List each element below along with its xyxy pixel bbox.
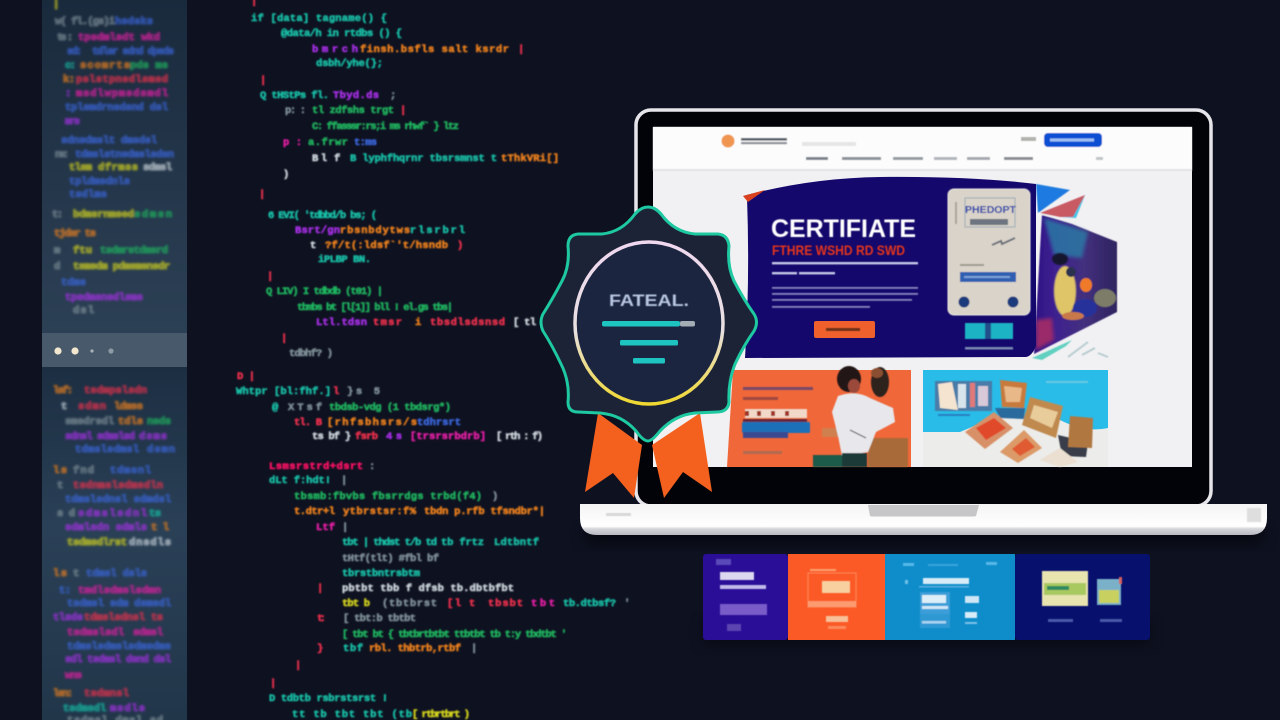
sidebar code listing, upper (52, 0, 174, 317)
sidebar code listing, lower: ts (151, 612, 163, 624)
code block: lower: tb.dtbsf? (563, 598, 616, 610)
code block: lower: D | (237, 371, 255, 383)
sidebar code listing, lower: tmdlsdmslsdmn (78, 585, 161, 597)
code block: lower: ) (492, 491, 498, 503)
laptop base (580, 504, 1267, 535)
sidebar code listing, upper: scomrts (80, 60, 130, 72)
sidebar code listing, lower: dsmn (147, 444, 175, 456)
sidebar code listing, lower: tsdmsdl (63, 703, 106, 715)
sidebar code listing, lower: tdmsnl (110, 465, 151, 477)
code block: lower: t (469, 598, 475, 610)
code block: upper: Q tHStPs fl. (260, 90, 329, 102)
sidebar code listing, lower: tdmsl dsls (86, 568, 147, 580)
code block: lower: | (341, 475, 347, 487)
code block: upper: | (518, 44, 524, 56)
banner red subtitle: FTHRE WSHD RD SWD (772, 242, 905, 258)
sidebar code listing, upper: tpsdmlsdt wkd (78, 32, 160, 44)
code block: lower: tbsbt (488, 598, 523, 610)
sidebar code listing, upper: d (54, 261, 60, 273)
code block: lower: tbt (531, 598, 555, 610)
sidebar code listing, upper: tdlsr sdnd dpsds (92, 46, 174, 58)
code block: lower: XTsf (288, 402, 322, 414)
code block: lower: ytbrstsr:f% (343, 506, 417, 518)
sidebar code listing, lower: tdmslsdnsl (84, 612, 145, 624)
sidebar code listing, lower: dnsdls (129, 537, 171, 549)
code block: lower: [ rth : f) (496, 431, 543, 443)
code block: lower: tbt | thdst t/b td (342, 537, 437, 549)
hero banner (743, 177, 1117, 360)
code block: middle: tmsr (373, 317, 402, 329)
code block: upper: tThkVRi[] (501, 153, 559, 165)
code block: upper: B lyphfhqrnr tbsrsmnst t (350, 153, 497, 165)
sidebar code listing, lower: sdmslsdnl (78, 508, 147, 520)
sidebar code listing, lower: tlsds (53, 612, 83, 624)
code block: lower: tbf (343, 643, 363, 655)
sidebar code listing, upper: bdmsrnmsed (73, 209, 134, 221)
code block: upper: @data/h in rtdbs () { (281, 28, 402, 40)
code block: upper: dsbh/yhe(}; (316, 58, 383, 70)
sidebar code listing, lower: fnd (73, 465, 94, 477)
sidebar code listing, lower (53, 385, 175, 720)
code block: middle: 6 EVI( 'tdbbd/b bs; ( (268, 210, 377, 222)
code block: middle: Bsrt/gn (295, 225, 340, 237)
sidebar code listing, lower: tsdnmslsdmsdln (73, 480, 163, 492)
sidebar toolbar with dots (42, 333, 187, 367)
thumbnail strip shadow (703, 620, 1150, 644)
code block: lower: ' (624, 598, 630, 610)
blue product card (923, 370, 1108, 467)
code block: upper: t:ms (354, 137, 377, 149)
code block: lower: [ tbt bt { tbtbrtbtbt ttbtbt tb t:y tbdtbt ' (342, 629, 567, 641)
code block: upper: if [data] tagname() { (251, 13, 387, 25)
code block: lower: | (471, 643, 477, 655)
code block: lower: tbdsb-vdg (1 tbdsrg*) (329, 402, 451, 414)
sidebar code listing, upper: ns: (55, 149, 69, 161)
code block: lower: | (342, 522, 348, 534)
thumbnail: orange (788, 554, 885, 640)
laptop (636, 110, 1211, 506)
sidebar code listing, lower: nsds (147, 416, 171, 428)
laptop screen bezel (636, 110, 1211, 506)
sidebar code listing, upper: tdmslstnsdmslsdsn (75, 149, 174, 161)
sidebar code listing, upper: ftu (73, 245, 92, 257)
sidebar code listing, lower: sdnsl sdmslsd (65, 431, 135, 443)
sidebar code listing, upper: tsmsdm pdmsmsnsdr (73, 261, 170, 273)
sidebar code listing, lower: lsn: (53, 688, 73, 700)
code block: upper: finsh.bsfls salt ksrdr (360, 44, 509, 56)
decorative art behind banner (1032, 184, 1117, 360)
thumbnail: purple (703, 554, 788, 640)
banner description lines (772, 262, 918, 308)
code block: middle: | (267, 271, 273, 283)
sidebar code listing, lower: ls (53, 465, 67, 477)
code block: upper: | (259, 189, 265, 201)
sidebar code listing, lower: tdmslsdmslsdmsdms (67, 641, 171, 653)
certificate card: PHEDOPT (965, 205, 1016, 216)
code block: lower: [l (447, 598, 461, 610)
code block: lower: t.dtr+l (294, 506, 335, 518)
sidebar code listing, upper: m (54, 245, 60, 257)
code block: lower: } (317, 643, 323, 655)
panel: file explorer sidebar (42, 0, 187, 720)
code block: lower: rbl. thbtrb,rtbf (369, 643, 461, 655)
code block: lower: : (369, 461, 375, 473)
code block: lower: [rhfsbhsrs/s (327, 417, 417, 429)
sidebar code listing, lower: ts (149, 508, 161, 520)
sidebar code listing, lower: t (61, 401, 67, 413)
code block: lower: | (270, 678, 276, 690)
sidebar code listing, upper: c: (65, 60, 76, 72)
sidebar code listing, lower: wns (65, 670, 82, 682)
code block: lower: (tbtbrst (382, 598, 437, 610)
sidebar code listing, lower: ldmss (114, 401, 143, 413)
code block: lower: [trsrsrbdrb] (410, 431, 486, 443)
code block: middle: t (310, 240, 316, 252)
sidebar code listing, lower: tdls (118, 416, 143, 428)
code block: upper: ; (390, 90, 396, 102)
orange promo card (727, 366, 911, 467)
sidebar code listing, upper: dfrmss (98, 162, 138, 174)
sidebar code listing, upper: mrs (65, 116, 80, 128)
sidebar code listing, upper: tlsm (69, 162, 92, 174)
laptop drop shadow (585, 525, 1263, 543)
sidebar code listing, upper: sdnsdmslt dmsdsl (61, 135, 157, 147)
sidebar code listing, lower: sd (57, 508, 75, 520)
code block: lower: pbtbt tbb f dfsb tb.dbtbfbt (342, 583, 514, 595)
code block: lower: @ (272, 402, 279, 414)
code block: lower: l (333, 386, 339, 398)
code block: lower: tbrstbntrsbtm (342, 568, 420, 580)
ribbon right (652, 413, 712, 498)
sidebar code listing, lower: t (57, 480, 63, 492)
code block: lower: tHtf(tlt) #fbl bf (342, 553, 439, 565)
certificate card (948, 189, 1030, 315)
sidebar code listing, lower: sdmlsdn sdmls (65, 522, 147, 534)
code block: middle: rbsnbdytws (340, 225, 410, 237)
code block: lower: Whtpr [bl:fhf.] (236, 386, 331, 398)
badge rosette (541, 207, 756, 441)
code block: lower (236, 371, 630, 720)
ribbon left (585, 413, 642, 498)
site header navigation (653, 127, 1192, 171)
code block: lower: tbt b (342, 598, 370, 610)
badge ring (575, 242, 723, 404)
sidebar code listing, upper: sd: (67, 46, 82, 58)
sidebar code listing, upper: tpldmsdnls (69, 176, 130, 188)
sidebar code listing, upper: tsdmrstdmsrd (100, 245, 168, 257)
code block: lower: tbdn p.rfb tfsndbr*| (424, 506, 545, 518)
code block: middle: | (281, 333, 287, 345)
sidebar code listing, upper: k: (63, 74, 75, 86)
code block: upper: p: (283, 137, 302, 149)
code block: lower: | (295, 660, 301, 672)
code block: upper: | (400, 105, 406, 117)
code block: lower: D tdbtb rsbrstsrst ! (269, 693, 388, 705)
sidebar code listing, lower: dsms (139, 431, 167, 443)
code block: lower: ts bf } (312, 431, 351, 443)
sidebar code listing, upper: tdms (61, 277, 86, 289)
code block: upper: a.frwr (308, 137, 348, 149)
code block: upper: Bl (312, 153, 327, 165)
sidebar code listing, upper: sdmsn (134, 209, 172, 221)
code block: middle (266, 210, 536, 360)
promo card people illustration (813, 366, 908, 467)
sidebar code listing, lower: tdmslsdnsl sdmdsl (65, 494, 171, 506)
sidebar code listing, lower: msdls (110, 703, 145, 715)
code block: middle: rlsrbrl (410, 225, 465, 237)
code block: lower: | (317, 583, 323, 595)
code block: upper (251, 0, 559, 201)
code block: middle: ) (457, 240, 463, 252)
sidebar code listing, upper: hsdsks (115, 16, 153, 28)
code block: lower: Ltf (316, 522, 335, 534)
website on laptop screen (653, 127, 1192, 467)
code block: lower: tl. B (294, 417, 323, 429)
sidebar code listing, lower: sdmsl (133, 627, 163, 639)
sidebar code listing, lower: tsdmsl sdm dsmsdl (67, 598, 171, 610)
sidebar code listing, lower: sdmn (78, 401, 106, 413)
badge lines (602, 321, 695, 364)
code block: lower: fsrb (355, 431, 378, 443)
sidebar code listing, lower: sdl tsdmsl dsnd dsl (65, 654, 171, 666)
sidebar code listing, lower: lsf: (53, 385, 73, 397)
banner title: CERTIFIATE (771, 215, 916, 243)
teal squares under card (965, 323, 1013, 350)
sidebar code listing, upper: : (65, 88, 71, 100)
sidebar code listing, lower: smsdrsdl (65, 416, 114, 428)
sidebar code listing, upper: ts : (57, 32, 73, 44)
thumbnail strip (703, 554, 1150, 640)
thumbnail: navy (1015, 554, 1150, 640)
sidebar code listing, upper: pds ms (130, 60, 168, 72)
code block: middle: Q LIV) I tdbdb (t01) | (266, 286, 383, 298)
code block: upper: C: ffasssr:rs;i ms rhwf` } ltz (312, 121, 459, 133)
code block: upper: tl zdfshs trgt (312, 105, 394, 117)
sidebar code listing, lower: tdmslsdmsl (75, 444, 139, 456)
code block: upper: Tbyd.ds (333, 90, 379, 102)
code block: middle: i (415, 317, 421, 329)
code block: lower: tbsmb:fbvbs fbsrrdgs trbd(f4) (294, 491, 482, 503)
badge label: FATEAL. (609, 291, 689, 310)
code block: upper: p: : (285, 105, 306, 117)
code block: lower: [ tbt:b tbtbt (343, 613, 416, 625)
code block: upper: ) (283, 169, 289, 181)
promo card text (742, 387, 813, 454)
thumbnail: blue (885, 554, 1015, 640)
code block: middle: iPLBP BN. (318, 254, 371, 266)
code block: middle: ?f/t(:ldsf`'t/hsndb (325, 240, 448, 252)
sidebar code listing, lower: tsdmsdlrst (67, 537, 127, 549)
trackpad notch (868, 505, 979, 516)
sidebar code listing, upper: tpsdmsnsdlsms (65, 292, 143, 304)
panel: main code editor (236, 0, 630, 720)
banner orange button (814, 321, 875, 338)
code block: middle: tbsdlsdsnsd (430, 317, 505, 329)
code block: upper: | (260, 75, 266, 87)
code block: upper: f (334, 153, 340, 165)
sidebar code listing, upper: w( fl.(gs)i (55, 16, 115, 28)
code block: lower: tb frtz (441, 537, 484, 549)
sidebar code listing, lower: t: (59, 585, 71, 597)
sidebar code listing, lower: tsdmnsl (84, 688, 129, 700)
code block: middle: tdbhf? ) (289, 348, 333, 360)
sidebar code listing, upper: tsdlms (69, 189, 107, 201)
code block: lower: }s 5 (347, 386, 380, 398)
award badge (541, 207, 756, 498)
sidebar code listing, upper: t: (52, 209, 63, 221)
sidebar code listing, lower: t (73, 568, 79, 580)
code block: lower: dLt f:hdt! (269, 475, 331, 487)
sidebar code listing, upper: msdlwpmsdsmdl (76, 88, 168, 100)
code block: lower: t: (317, 613, 326, 625)
sidebar code listing, lower: tsdmslsdl (67, 627, 124, 639)
code block: lower: Lsmsrstrd+dsrt (269, 461, 363, 473)
product card items (935, 380, 1093, 467)
sidebar code listing, upper: tplsmdrnsdsnd dsl (65, 102, 168, 114)
sidebar code listing, lower: tl (151, 522, 169, 534)
code block: lower: tdhrsrt (417, 417, 461, 429)
code block: middle: [ tl (513, 317, 536, 329)
code block: lower: 4s (386, 431, 402, 443)
sidebar code listing, lower: tsdmpslsdn (84, 385, 147, 397)
banner background (743, 177, 1036, 358)
sidebar code listing, upper: sdmsl (143, 162, 172, 174)
sidebar code listing, upper: pslstpnsdlsmsd (76, 74, 168, 86)
code block: lower: Ldtbntf (494, 537, 539, 549)
code block: middle: tbmbs bt [l[1]] bll ! el.gs tbs| (297, 302, 453, 314)
sidebar code listing, upper: dsl (73, 305, 94, 317)
code block: middle: Ltl.tdsn (316, 317, 367, 329)
sidebar code listing, lower: ls (53, 568, 67, 580)
code block: upper: bmrch (312, 44, 358, 56)
sidebar code listing, upper: tjdsr ts (54, 228, 96, 240)
